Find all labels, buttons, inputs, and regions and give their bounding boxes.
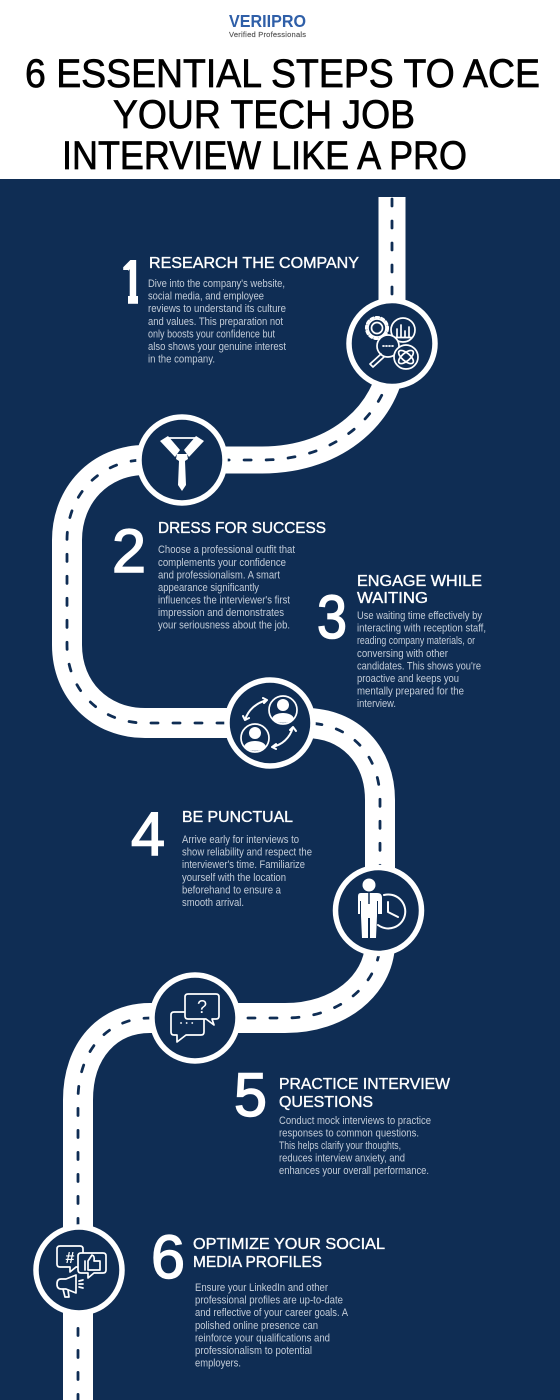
step 1: social media, and employee (148, 291, 264, 303)
step 3: interview. (357, 698, 396, 710)
icon: person and clock (336, 868, 422, 954)
step 1: and values. This preparation not (148, 316, 283, 328)
logo: Verified Professionals (229, 30, 306, 39)
step 3: candidates. This shows you're (357, 660, 481, 672)
step 2: influences the interviewer's first (158, 594, 290, 606)
step 2: DRESS FOR SUCCESS (158, 520, 326, 537)
step 4 (131, 800, 312, 909)
step 3: interacting with reception staff, (357, 622, 486, 634)
step 6: professional profiles are up-to-date (195, 1295, 343, 1307)
step 3: mentally prepared for the (357, 686, 464, 698)
step 1: in the company. (148, 354, 215, 366)
step 3: proactive and keeps you (357, 673, 459, 685)
step 4: interviewer's time. Familiarize (182, 859, 305, 871)
step 2 (112, 517, 326, 632)
step 1 (121, 248, 359, 366)
title: INTERVIEW LIKE A PRO (62, 134, 467, 178)
step 4: yourself with the location (182, 872, 286, 884)
step 2: impression and demonstrates (158, 607, 285, 619)
logo (229, 11, 306, 39)
step 6: reinforce your qualifications and (195, 1332, 330, 1344)
step 2: Choose a professional outfit that (158, 544, 295, 556)
icon: people exchange (227, 680, 313, 766)
step 2: 2 (112, 517, 146, 585)
icon: chat bubbles (152, 975, 238, 1061)
step 5: This helps clarify your thoughts, (279, 1140, 401, 1152)
step 1: RESEARCH THE COMPANY (149, 255, 359, 272)
step 2: complements your confidence (158, 557, 286, 569)
step 6 (151, 1223, 385, 1370)
icon: research (349, 300, 435, 386)
step 1: only boosts your confidence but (148, 328, 275, 340)
step 6: 6 (151, 1223, 185, 1291)
step 5: 5 (234, 1061, 267, 1129)
step 3: WAITING (357, 590, 428, 607)
step 6: employers. (195, 1358, 241, 1370)
step 3: reading company materials, or (357, 635, 475, 647)
step 3: Use waiting time effectively by (357, 610, 483, 622)
step 2: appearance significantly (158, 582, 260, 594)
step 6: MEDIA PROFILES (193, 1254, 322, 1271)
step 5: Conduct mock interviews to practice (279, 1115, 431, 1127)
step 6: OPTIMIZE YOUR SOCIAL (193, 1236, 385, 1253)
step 2: your seriousness about the job. (158, 620, 290, 632)
step 1: reviews to understand its culture (148, 303, 286, 315)
step 4: beforehand to ensure a (182, 884, 281, 896)
step 3: ENGAGE WHILE (357, 573, 482, 590)
step 5: reduces interview anxiety, and (279, 1152, 405, 1164)
step 1: also shows your genuine interest (148, 341, 286, 353)
winding road (67, 197, 392, 1400)
step 1: 1 (121, 248, 143, 316)
title: 6 ESSENTIAL STEPS TO ACE (25, 52, 540, 96)
step 5: enhances your overall performance. (279, 1165, 429, 1177)
icon: social media: # (66, 1250, 75, 1267)
step 1: Dive into the company's website, (148, 278, 285, 290)
step 4: show reliability and respect the (182, 846, 312, 858)
title (25, 52, 540, 178)
icon: tie (139, 417, 225, 503)
icon: social media (36, 1227, 122, 1313)
step 6: polished online presence can (195, 1320, 318, 1332)
step 4: 4 (131, 800, 165, 868)
title: YOUR TECH JOB (113, 93, 415, 137)
step 4: smooth arrival. (182, 897, 244, 909)
step 5 (234, 1061, 450, 1177)
step 3: conversing with other (357, 648, 448, 660)
step 5: responses to common questions. (279, 1128, 419, 1140)
step 4: Arrive early for interviews to (182, 834, 299, 846)
logo: VERIIPRO (229, 11, 306, 31)
step 3 (317, 573, 486, 710)
step 3: 3 (317, 583, 347, 651)
step 6: Ensure your LinkedIn and other (195, 1282, 328, 1294)
step 5: PRACTICE INTERVIEW (279, 1076, 450, 1093)
icon: chat bubbles: ? (197, 997, 207, 1017)
step 5: QUESTIONS (279, 1094, 373, 1111)
step 4: BE PUNCTUAL (182, 809, 293, 826)
step 6: professionalism to potential (195, 1345, 312, 1357)
step 2: and professionalism. A smart (158, 570, 280, 582)
step 6: and reflective of your career goals. A (195, 1307, 349, 1319)
